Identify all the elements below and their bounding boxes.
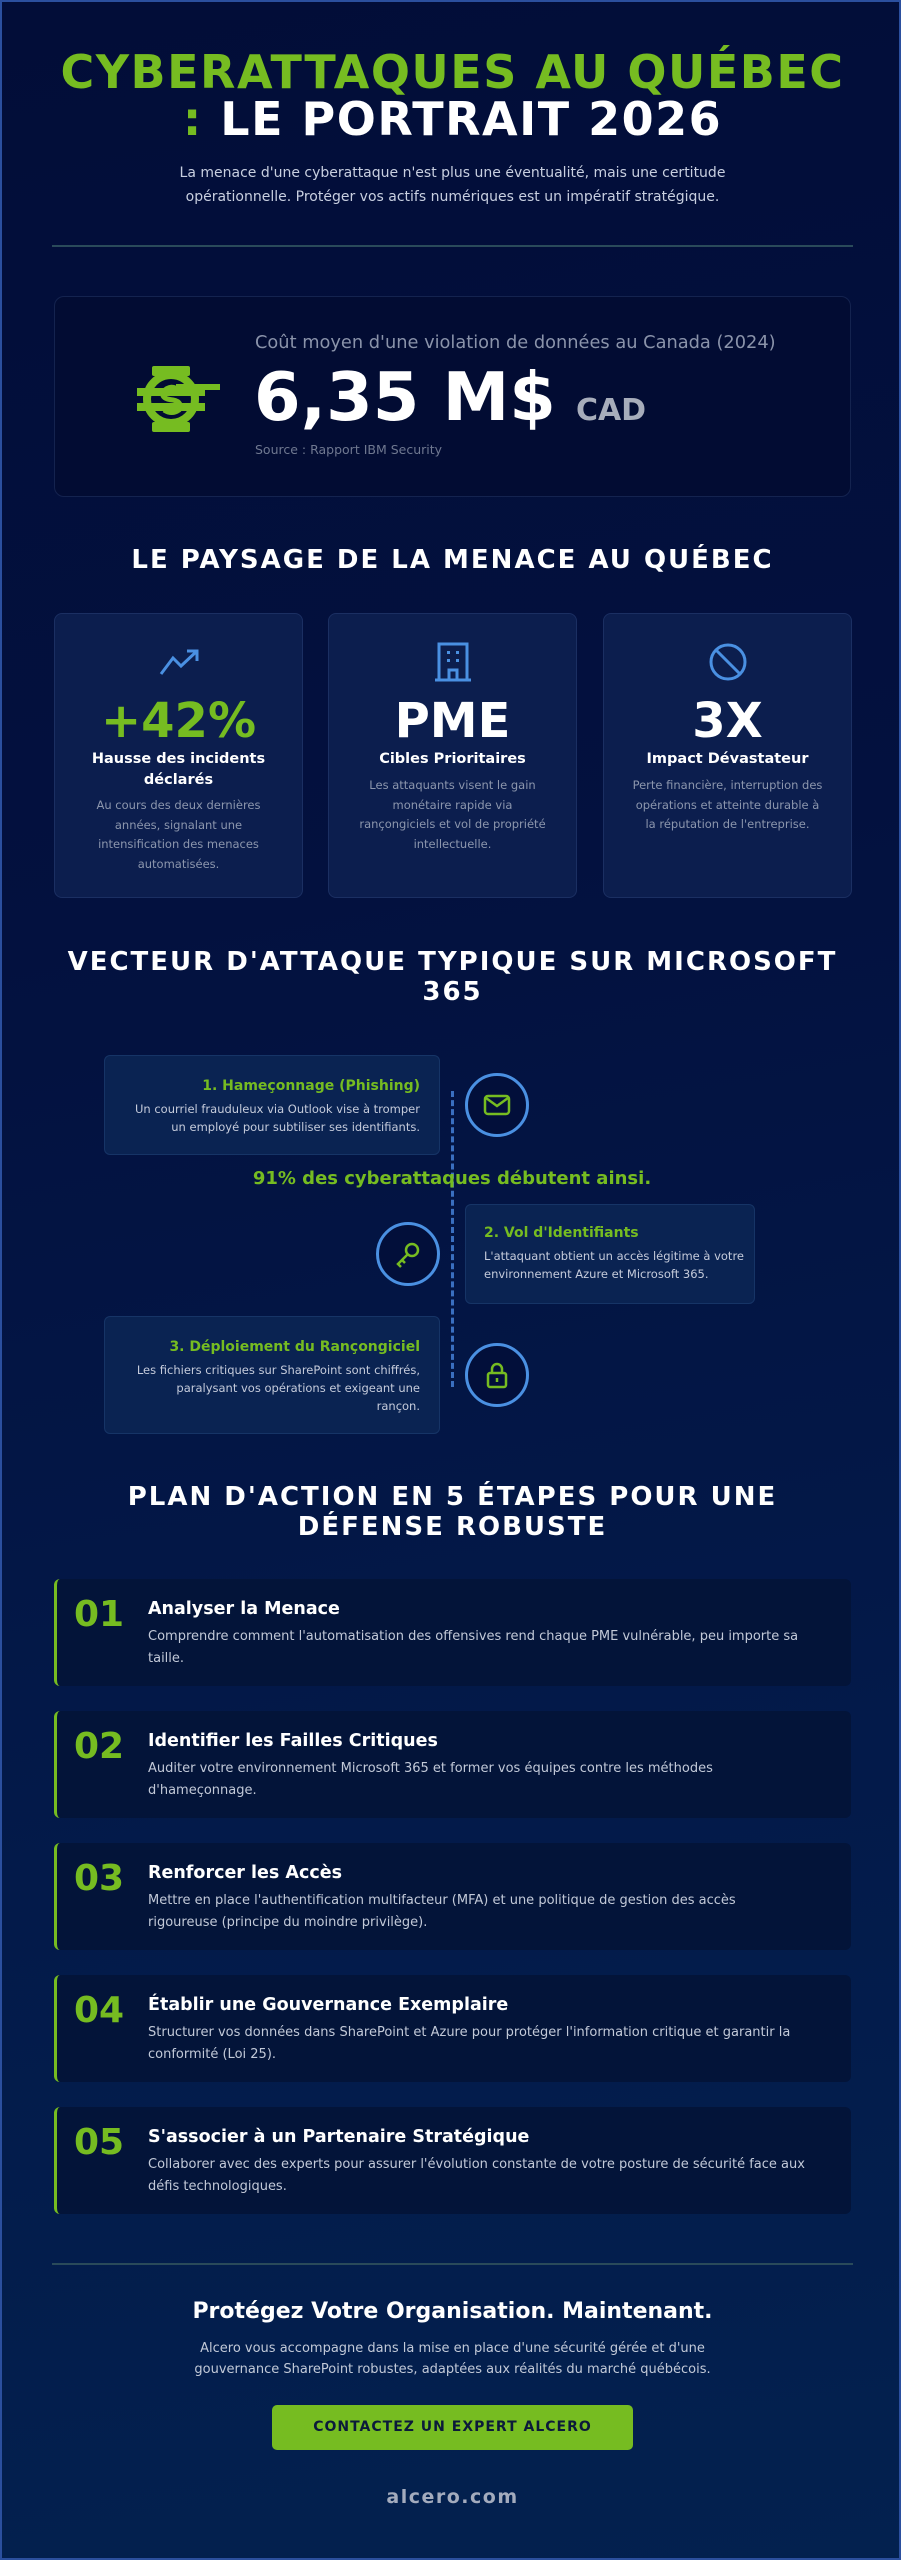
panel: cost stat [54, 296, 851, 497]
stat label: Coût moyen d'une violation de données au Canada (2024) [255, 332, 776, 353]
step 02: 02 [74, 1726, 124, 1767]
step 03: rigoureuse (principe du moindre privilège). [148, 1915, 427, 1930]
footer url: alcero.com [386, 2486, 519, 2508]
step 04: 04 [74, 1990, 124, 2031]
step 2 box: 2. Vol d'Identifiants [484, 1225, 639, 1241]
panel: PME [328, 613, 577, 898]
icon: lock [465, 1343, 529, 1407]
step 3 box: paralysant vos opérations et exigeant une [176, 1381, 420, 1395]
timeline line [451, 1091, 454, 1387]
panel: +42% [54, 613, 303, 898]
step 02: d'hameçonnage. [148, 1783, 257, 1798]
heading: vecteur [68, 947, 837, 1007]
step 2 box [465, 1204, 755, 1304]
icon: prohibited [710, 644, 746, 680]
panel: 3X: Impact Dévastateur [647, 751, 808, 767]
panel: +42%: +42% [101, 693, 256, 749]
heading: paysage: LE PAYSAGE DE LA MENACE AU QUÉBEC [131, 545, 774, 575]
step 01: Analyser la Menace [148, 1599, 340, 1619]
step 05: Collaborer avec des experts pour assurer l'évolution constante de votre posture de sécurité face aux défis technologiques. [148, 2157, 805, 2194]
icon: mail [465, 1073, 529, 1137]
icon: trend up [160, 650, 198, 675]
step 03: Renforcer les Accès [148, 1863, 342, 1883]
step 2 box: L'attaquant obtient un accès légitime à votre environnement Azure et Microsoft 365. [484, 1249, 744, 1281]
step 05 [54, 2107, 851, 2214]
stat value: 6,35 M$ CAD [254, 358, 646, 436]
step 03: 03 [74, 1858, 124, 1899]
CTA button [272, 2405, 633, 2450]
step 3 box: rançon. [377, 1399, 420, 1413]
step 3 box: Les fichiers critiques sur SharePoint sont chiffrés, [137, 1363, 420, 1377]
step 04: Établir une Gouvernance Exemplaire [148, 1995, 508, 2015]
heading: plan: PLAN D'ACTION EN 5 ÉTAPES POUR UNE [128, 1482, 777, 1512]
title [60, 45, 845, 146]
heading: plan: DÉFENSE ROBUSTE [298, 1512, 607, 1542]
heading: plan [128, 1481, 777, 1542]
panel: 3X: 3X [692, 693, 763, 749]
step 1 box: 1. Hameçonnage (Phishing) [202, 1078, 420, 1094]
subtitle: opérationnelle. Protéger vos actifs numériques est un impératif stratégique. [186, 189, 719, 205]
CTA text: Alcero vous accompagne dans la mise en place d'une sécurité gérée et d'une [200, 2341, 705, 2356]
heading: vecteur: VECTEUR D'ATTAQUE TYPIQUE SUR MICROSOFT [68, 947, 837, 977]
title: CYBERATTAQUES AU QUÉBEC [60, 45, 845, 99]
timeline [104, 1055, 755, 1434]
step 1 box: Un courriel frauduleux via Outlook vise à tromper un employé pour subtiliser ses identifiants. [135, 1102, 420, 1134]
panel: PME: Les attaquants visent le gain monétaire rapide via rançongiciels et vol de propriété intellectuelle. [359, 778, 546, 850]
step 05: S'associer à un Partenaire Stratégique [148, 2127, 529, 2147]
step 03: Mettre en place l'authentification multifacteur (MFA) et une politique de gestion des accès [148, 1893, 736, 1908]
panel: 3X [603, 613, 852, 898]
step 3 box: 3. Déploiement du Rançongiciel [169, 1339, 420, 1355]
panel: +42%: Au cours des deux dernières années, signalant une intensification des menaces automatisées. [96, 798, 260, 870]
panel: +42%: déclarés [144, 772, 213, 788]
step 02: Auditer votre environnement Microsoft 365 et former vos équipes contre les méthodes [148, 1761, 713, 1776]
step 04 [54, 1975, 851, 2082]
source: Source : Rapport IBM Security [255, 442, 442, 457]
step 01: Comprendre comment l'automatisation des offensives rend chaque PME vulnérable, peu importe sa taille. [148, 1629, 798, 1666]
panel: PME: Cibles Prioritaires [379, 751, 526, 767]
step 05: 05 [74, 2122, 124, 2163]
panel: +42%: Hausse des incidents [92, 751, 265, 767]
CTA heading: Protégez Votre Organisation. Maintenant. [192, 2299, 713, 2324]
subtitle [180, 165, 725, 205]
panel: 3X: Perte financière, interruption des opérations et atteinte durable à la réputation de l'entreprise. [633, 778, 822, 831]
step 3 box [104, 1316, 440, 1434]
icon: key [376, 1222, 440, 1286]
step 03 [54, 1843, 851, 1950]
panel: PME: PME [395, 693, 510, 749]
CTA button: CONTACTEZ UN EXPERT ALCERO [313, 2419, 592, 2435]
title: : LE PORTRAIT 2026 [183, 92, 722, 146]
subtitle: La menace d'une cyberattaque n'est plus une éventualité, mais une certitude [180, 165, 725, 181]
icon: currency shield [137, 366, 220, 432]
step 02 [54, 1711, 851, 1818]
callout: 91%: 91% des cyberattaques débutent ainsi. [253, 1168, 651, 1189]
step 01: 01 [74, 1594, 124, 1635]
CTA text: gouvernance SharePoint robustes, adaptées aux réalités du marché québécois. [194, 2362, 711, 2377]
step 1 box [104, 1055, 440, 1155]
heading: vecteur: 365 [422, 977, 483, 1007]
step 01 [54, 1579, 851, 1686]
step 02: Identifier les Failles Critiques [148, 1731, 438, 1751]
icon: building [435, 642, 471, 682]
step 04: Structurer vos données dans SharePoint et Azure pour protéger l'information critique et garantir la conformité (Loi 25). [148, 2025, 790, 2062]
CTA text [194, 2341, 711, 2377]
